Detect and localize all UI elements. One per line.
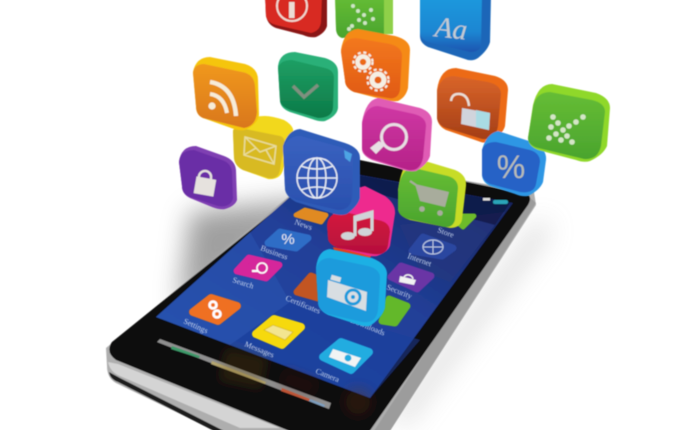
icon: mail yellow [233, 116, 293, 179]
floating icons [179, 0, 610, 326]
screen app: camera: Camera [314, 367, 341, 384]
screen app: messages [243, 319, 301, 360]
icon: open lock [437, 68, 508, 143]
screen icons [182, 210, 474, 384]
icon: gears [341, 29, 410, 101]
screen app: store [436, 216, 474, 240]
screen app: certificates [284, 276, 326, 316]
screen app: downloads [349, 299, 407, 338]
icon: rss [193, 57, 259, 130]
shadow behind phone [178, 195, 550, 425]
black face [109, 158, 530, 430]
screen app: news [293, 210, 326, 232]
status indicators [483, 198, 490, 200]
screen app: settings: Settings [182, 317, 209, 335]
icon: lock purple [179, 146, 237, 209]
red strip under music icon [333, 247, 372, 259]
screen app: internet [406, 237, 453, 269]
screen app: search [231, 258, 279, 291]
screen app: settings [182, 298, 237, 335]
screen app: certificates: Certificates [284, 294, 322, 316]
screen [156, 168, 513, 398]
screen app: business: Business [259, 243, 289, 262]
icon: percent blue [482, 131, 546, 196]
icon: magnifier [362, 98, 432, 171]
icon: camera [316, 249, 387, 326]
icon: font Aa [420, 0, 491, 60]
screen app: camera [314, 342, 369, 384]
screen app: messages: Messages [243, 340, 275, 360]
icon: music [327, 186, 395, 256]
screen app: store: Store [436, 225, 456, 240]
icon: dots green [528, 84, 610, 162]
silver edge [106, 159, 536, 430]
icon: percent blue: % [497, 149, 525, 185]
icon: check [278, 52, 338, 121]
screen app: search: Search [231, 275, 255, 291]
icon: info [265, 0, 327, 37]
screen app: security: Security [385, 283, 413, 301]
phone body [106, 158, 536, 430]
home button bar [157, 339, 331, 409]
screen app: downloads: Downloads [349, 316, 386, 338]
screen app: business [259, 231, 308, 262]
icon: dots green top [335, 0, 393, 38]
icon: cart [398, 158, 466, 228]
faint reflections in bezel [218, 348, 373, 417]
screen app: news: News [293, 217, 314, 232]
screen app: business: % [281, 231, 295, 248]
icon: globe [283, 129, 360, 215]
screen app: internet: Internet [406, 251, 433, 269]
screen app: security [385, 266, 431, 301]
icon: font Aa: Aa [431, 11, 469, 47]
